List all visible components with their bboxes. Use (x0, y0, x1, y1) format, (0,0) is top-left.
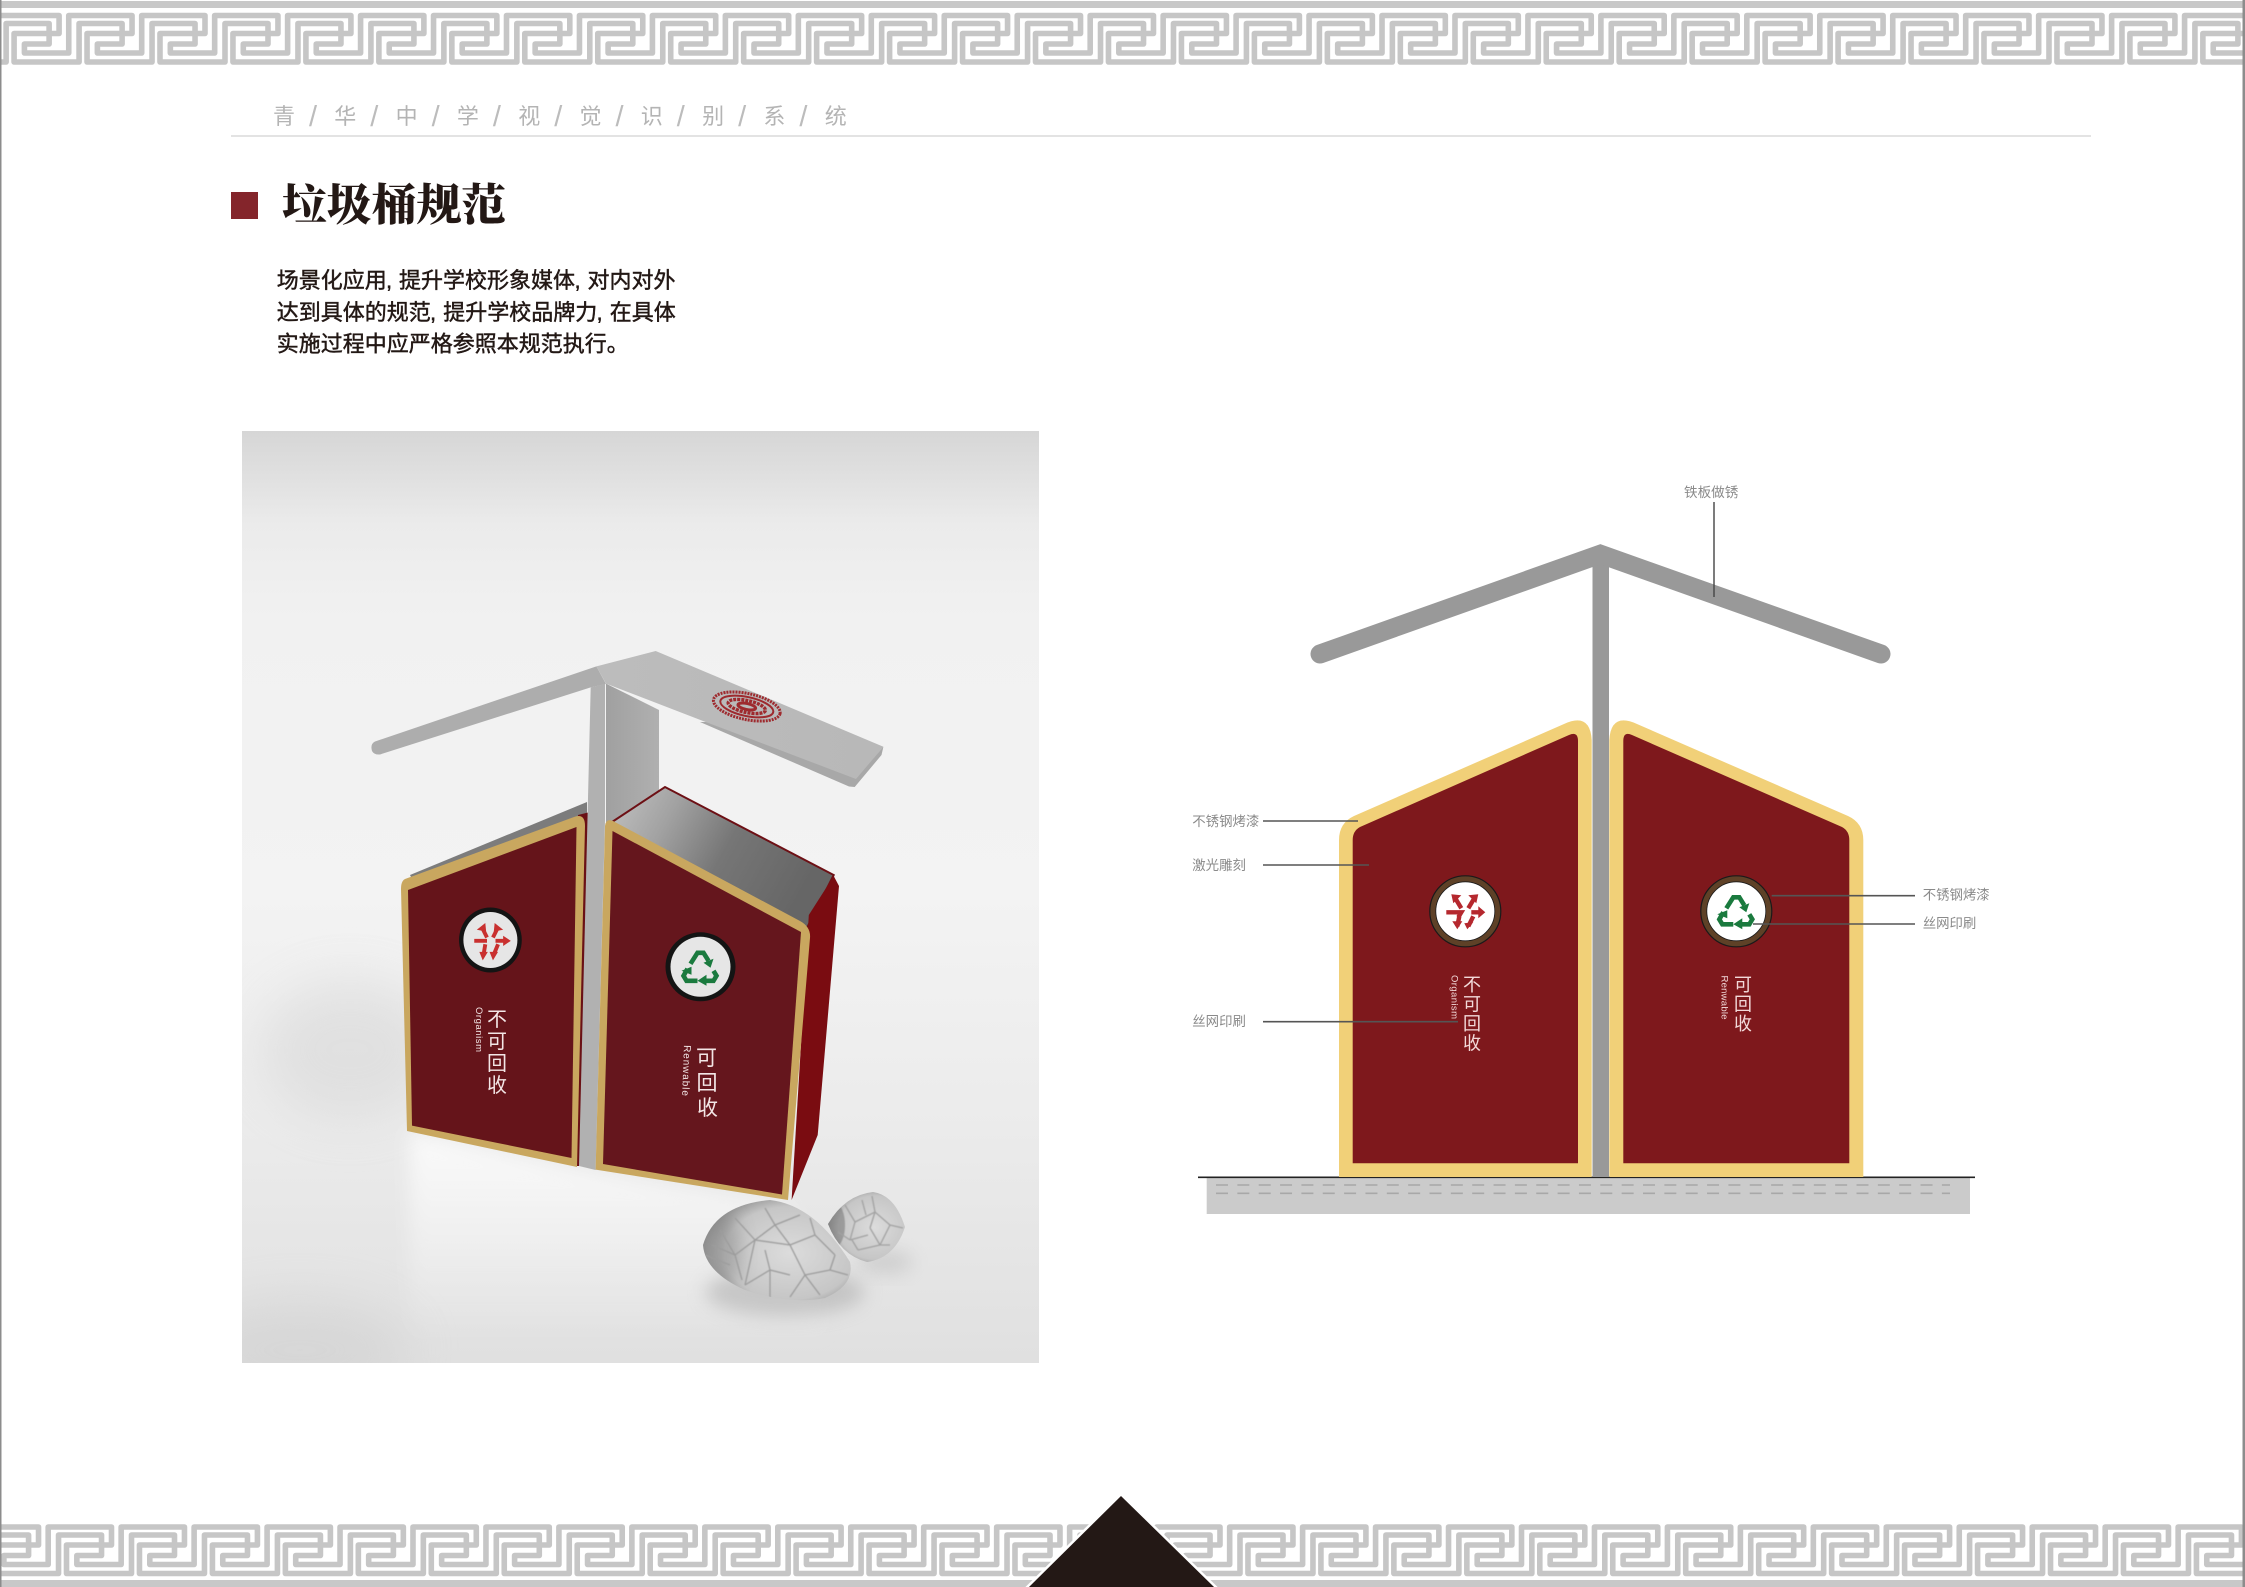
bin label: recyclable: Renwable (1718, 976, 1730, 1020)
description text: , (596, 300, 603, 325)
bin label: recyclable: 可回收 (1734, 975, 1752, 1034)
description text: 提升学校形象媒体 (399, 268, 575, 293)
left bin panel (401, 816, 585, 1167)
bin label: recyclable: Renwable (679, 1045, 692, 1097)
header: running title: 青华中学视觉识别系统 (273, 104, 847, 129)
callout: screen printing left: 丝网印刷 (1192, 1014, 1246, 1029)
bin label: non-recyclable (473, 1007, 507, 1097)
left bin elevation (1339, 720, 1592, 1177)
description text: 场景化应用 (277, 268, 387, 293)
stone shadows (705, 1250, 913, 1316)
right bin panel (596, 820, 810, 1200)
central post (579, 684, 605, 1170)
icon: non-recyclable badge (1430, 876, 1501, 947)
roof front edge (700, 722, 883, 787)
heading text: 垃圾桶规范 (282, 181, 506, 230)
photo background (242, 431, 1039, 1363)
description text: 提升学校品牌力 (443, 300, 597, 325)
icon: recyclable badge (666, 932, 736, 1001)
description text: 达到具体的规范 (277, 300, 431, 325)
bottom triangle marker (1029, 1496, 1214, 1587)
bin label: non-recyclable: 不可回收 (1463, 975, 1481, 1054)
bin label: non-recyclable: Organism (1448, 975, 1460, 1020)
bin label: recyclable: 可回收 (696, 1047, 718, 1120)
icon: non-recyclable badge (459, 908, 522, 972)
top meander border (0, 1, 2245, 62)
description text: , (386, 268, 392, 293)
large stone (703, 1200, 851, 1300)
bin label: recyclable (682, 1046, 718, 1117)
roof right wing (596, 651, 883, 780)
ground slab (1198, 1177, 1975, 1214)
bin label: non-recyclable: Organism (473, 1007, 484, 1053)
callout: roof material (1684, 485, 1739, 597)
callout: frame material: 不锈钢烤漆 (1192, 814, 1259, 829)
floor shadows (242, 987, 406, 1363)
bin label: recyclable (1718, 975, 1752, 1034)
roof seal (712, 690, 782, 722)
description text: 在具体 (610, 300, 676, 325)
callout: roof material: 铁板做锈 (1684, 485, 1739, 500)
header: running title (231, 101, 2091, 137)
right bin opening (609, 787, 839, 1200)
bin label: non-recyclable: 不可回收 (487, 1009, 507, 1097)
description text (277, 268, 676, 356)
callout: laser engraving: 激光雕刻 (1192, 858, 1246, 873)
description text: 对内对外 (588, 268, 676, 293)
heading marker (231, 192, 258, 219)
left bin rear sliver (410, 802, 587, 885)
description text: , (574, 268, 581, 293)
description text: , (430, 300, 436, 325)
roof left wing (371, 666, 606, 755)
header: running title: ///////// (309, 101, 808, 133)
floor reflection (412, 1137, 750, 1249)
small stone (828, 1192, 905, 1262)
callout: badge ring material: 不锈钢烤漆 (1923, 888, 1990, 902)
post and roof (1320, 554, 1881, 1177)
description text: 实施过程中应严格参照本规范执行。 (277, 332, 629, 356)
rear post face (606, 684, 659, 825)
right bin elevation (1609, 720, 1863, 1177)
panel: elevation drawing (1192, 485, 1990, 1214)
bottom meander border (0, 1527, 2245, 1587)
callout: screen printing right: 丝网印刷 (1923, 916, 1976, 931)
section heading (231, 181, 506, 230)
bin label: non-recyclable (1448, 975, 1481, 1054)
panel: 3D render of the bins (190, 431, 1039, 1400)
icon: recyclable badge (1701, 876, 1772, 947)
